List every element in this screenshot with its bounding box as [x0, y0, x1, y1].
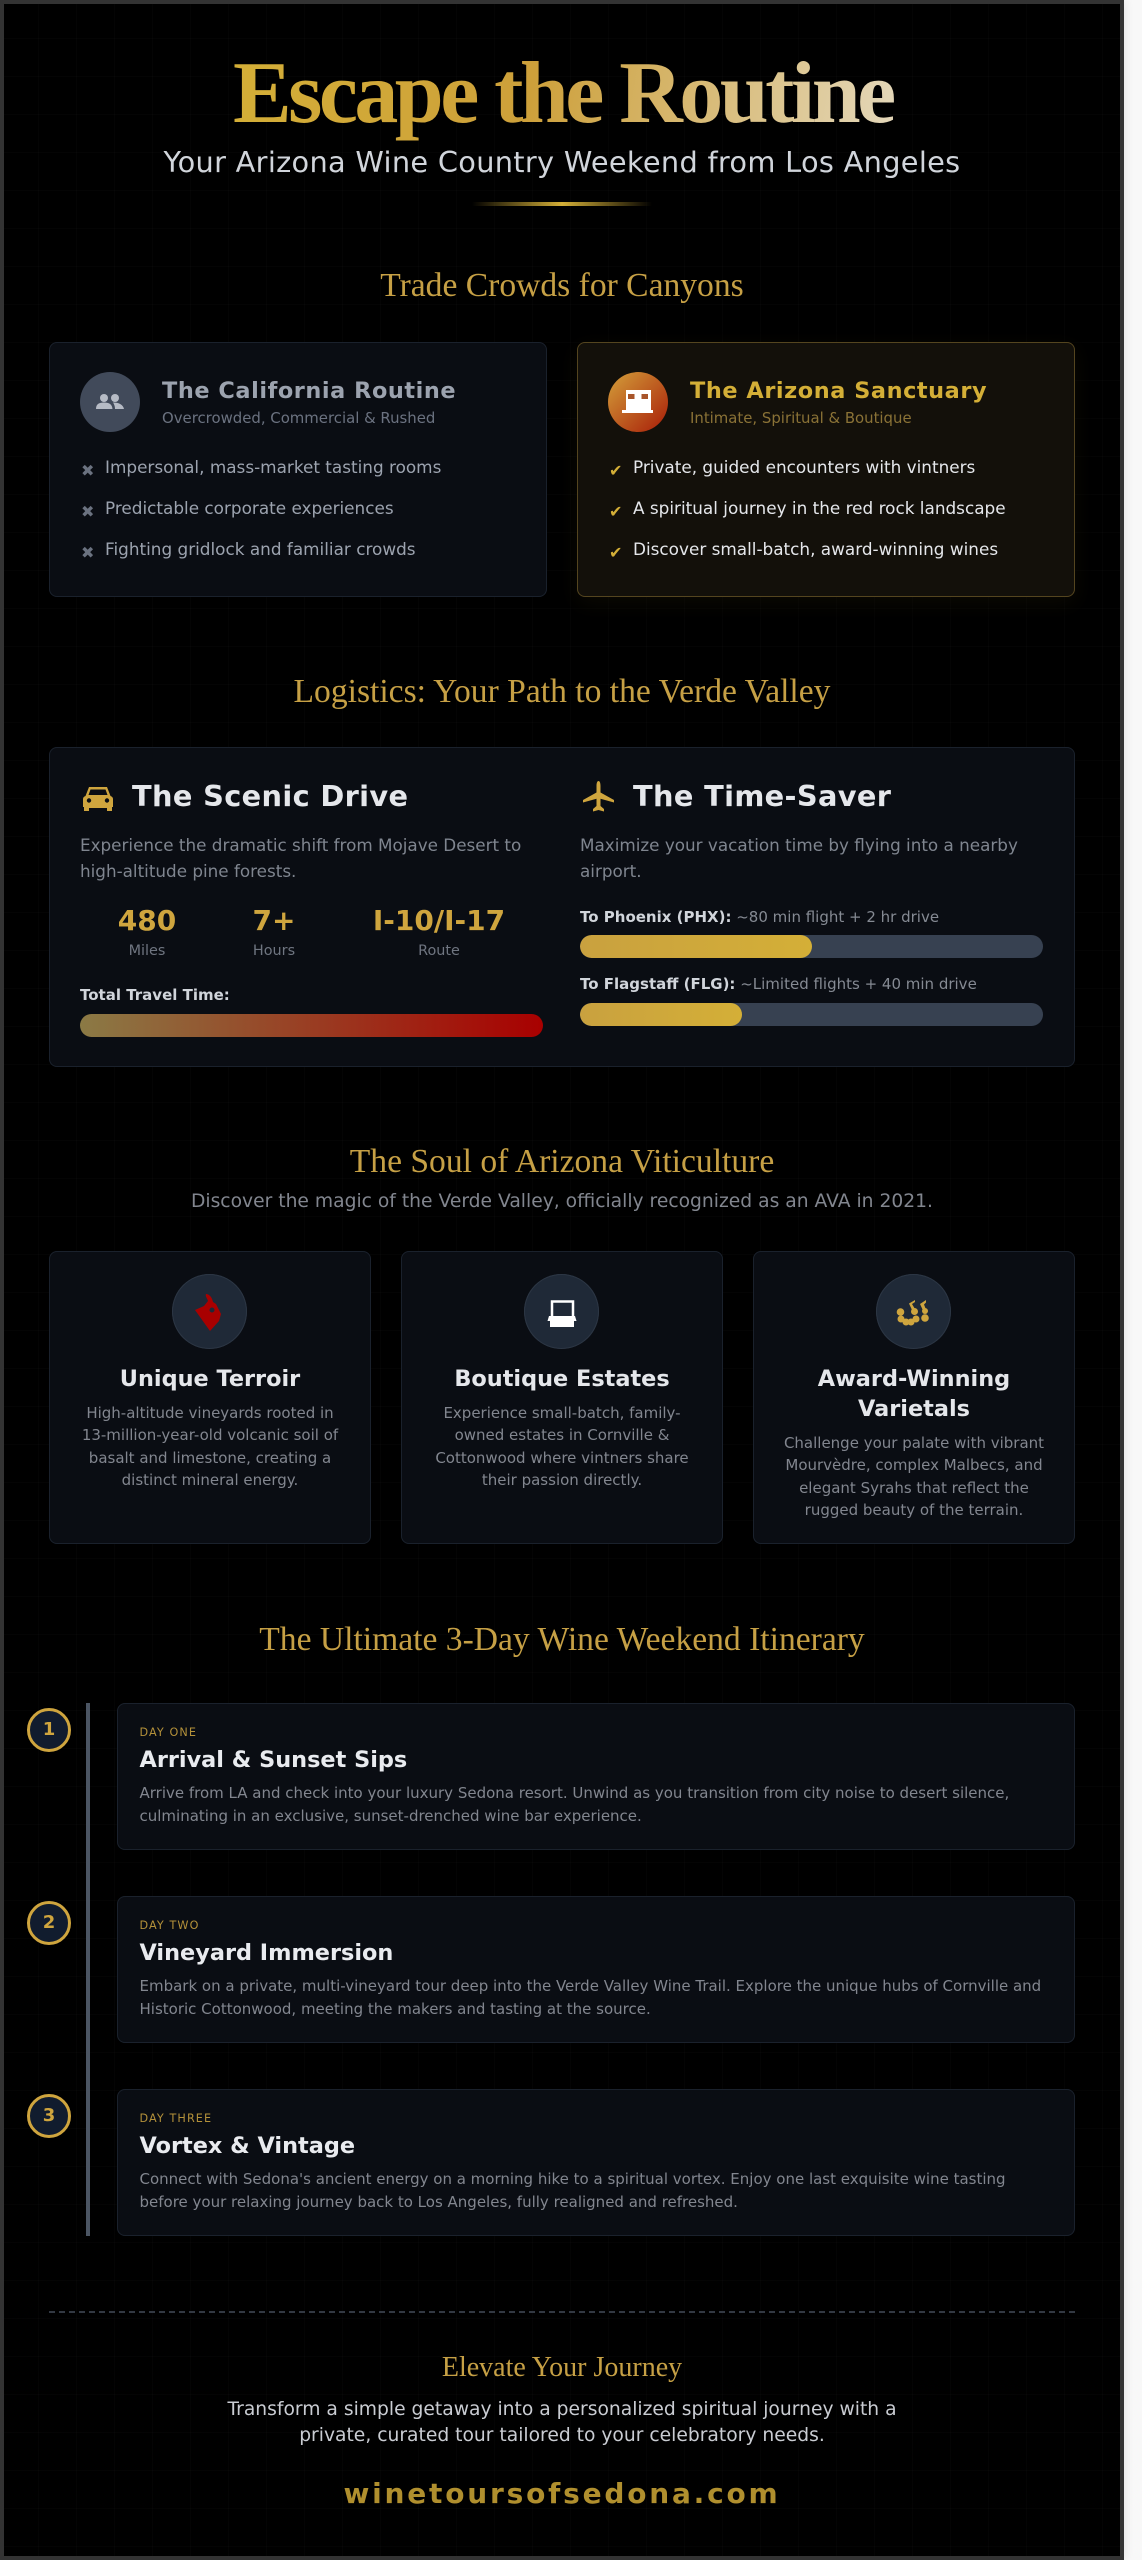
card subtitle: Intimate, Spiritual & Boutique: [690, 408, 912, 426]
list item: Predictable corporate experiences: [105, 498, 394, 518]
heading: trade crowds: Trade Crowds for Canyons: [380, 266, 744, 304]
label: total travel time: Total Travel Time:: [80, 986, 230, 1004]
card text: their passion directly.: [482, 1471, 642, 1489]
panel: boutique estates: [401, 1251, 723, 1544]
stat: hours: [253, 904, 295, 959]
drive description: high-altitude pine forests.: [80, 860, 296, 880]
day three: [27, 2089, 1075, 2236]
panel: unique terroir: [49, 1251, 371, 1544]
heading: soul of arizona: The Soul of Arizona Viticulture: [350, 1143, 774, 1180]
day text: before your relaxing journey back to Los Angeles, fully realigned and refreshed.: [140, 2193, 738, 2211]
step marker: [27, 2094, 71, 2138]
timeline line: [86, 1703, 90, 2236]
step marker: [27, 1708, 71, 1752]
card text: Experience small-batch, family-: [443, 1404, 681, 1422]
card text: elegant Syrahs that reflect the: [799, 1478, 1029, 1496]
card text: Mourvèdre, complex Malbecs, and: [785, 1456, 1043, 1474]
label: phoenix: To Phoenix (PHX): ~80 min flight + 2 hr drive: [580, 908, 939, 926]
list item: ✔: [609, 543, 622, 562]
day card: [117, 2089, 1075, 2236]
heading: logistics: Logistics: Your Path to the Verde Valley: [294, 673, 830, 710]
closing text: private, curated tour tailored to your celebratory needs.: [299, 2425, 825, 2446]
drive description: [80, 834, 521, 880]
card text: Challenge your palate with vibrant: [784, 1434, 1044, 1452]
list item: ✖: [81, 461, 94, 480]
panel: california routine: [49, 342, 547, 597]
card text: [82, 1404, 338, 1489]
gold divider: [472, 202, 652, 206]
stat: route: I-10/I-17: [373, 904, 505, 937]
day text: [140, 1784, 1009, 1825]
label: flagstaff: To Flagstaff (FLG): ~Limited flights + 40 min drive: [580, 975, 977, 993]
stat: miles: 480: [118, 904, 176, 937]
stat: miles: Miles: [129, 943, 165, 959]
list item: ✔: [609, 502, 622, 521]
list item: Discover small-batch, award-winning wines: [633, 539, 998, 559]
website link: winetoursofsedona.com: [343, 2477, 781, 2510]
stat: miles: [118, 904, 176, 959]
card title: The California Routine: [162, 378, 456, 404]
day text: [140, 2170, 1006, 2211]
day text: Arrive from LA and check into your luxury Sedona resort. Unwind as you transition from city noise to desert silence,: [140, 1784, 1009, 1802]
flight description: [580, 834, 1018, 880]
card text: basalt and limestone, creating a: [89, 1448, 331, 1466]
icon: people: [80, 372, 140, 432]
stat: route: [373, 904, 505, 959]
day two: [27, 1896, 1075, 2043]
day label: DAY TWO: [140, 1919, 200, 1932]
day label: DAY ONE: [140, 1726, 197, 1739]
card title: [818, 1366, 1010, 1422]
panel: arizona sanctuary: [577, 342, 1075, 597]
panel: logistics: [49, 747, 1075, 1067]
card text: Cottonwood where vintners share: [435, 1448, 689, 1466]
day label: DAY THREE: [140, 2112, 212, 2125]
step marker: 2: [43, 1912, 55, 1933]
bar: phoenix: [580, 935, 1043, 958]
day text: culminating in an exclusive, sunset-drenched wine bar experience.: [140, 1807, 642, 1825]
card text: [784, 1434, 1044, 1519]
title: Escape the Routine: [233, 45, 893, 142]
bar: flagstaff: [580, 1003, 1043, 1026]
day text: Connect with Sedona's ancient energy on a morning hike to a spiritual vortex. Enjoy one last exquisite wine tasting: [140, 2170, 1006, 2188]
card text: owned estates in Cornville &: [455, 1426, 669, 1444]
drive description: Experience the dramatic shift from Mojave Desert to: [80, 834, 521, 854]
icon: grapes: [876, 1274, 951, 1349]
day card: [117, 1896, 1075, 2043]
drive title: The Scenic Drive: [132, 779, 408, 813]
closing text: Transform a simple getaway into a personalized spiritual journey with a: [227, 2399, 897, 2420]
step marker: 3: [43, 2105, 55, 2126]
card title: Award-Winning: [818, 1366, 1010, 1392]
list item: Impersonal, mass-market tasting rooms: [105, 457, 441, 477]
heading: elevate: Elevate Your Journey: [442, 2352, 682, 2383]
day title: Vortex & Vintage: [140, 2132, 355, 2158]
flight title: The Time-Saver: [633, 779, 891, 813]
step marker: 1: [43, 1719, 55, 1740]
day text: [140, 1977, 1041, 2018]
icon: terroir: [172, 1274, 247, 1349]
list item: ✖: [81, 543, 94, 562]
icon: plane: [583, 781, 614, 812]
list item: ✖: [81, 502, 94, 521]
bar: total travel time: [80, 1014, 543, 1037]
stat: route: Route: [418, 943, 460, 959]
icon: car: [83, 787, 113, 811]
day one: [27, 1703, 1075, 1850]
card title: Unique Terroir: [120, 1366, 300, 1392]
card subtitle: Overcrowded, Commercial & Rushed: [162, 408, 435, 426]
flight description: Maximize your vacation time by flying into a nearby: [580, 834, 1018, 854]
card text: 13-million-year-old volcanic soil of: [82, 1426, 338, 1444]
subtitle: Your Arizona Wine Country Weekend from Los Angeles: [164, 145, 960, 179]
day title: Vineyard Immersion: [140, 1940, 393, 1966]
list item: Fighting gridlock and familiar crowds: [105, 539, 416, 559]
day text: Embark on a private, multi-vineyard tour deep into the Verde Valley Wine Trail. Explore the unique hubs of Cornville and: [140, 1977, 1041, 1995]
stat: hours: 7+: [253, 904, 295, 937]
icon: hotel: [608, 372, 668, 432]
card text: High-altitude vineyards rooted in: [86, 1404, 334, 1422]
section intro: Discover the magic of the Verde Valley, officially recognized as an AVA in 2021.: [191, 1190, 933, 1212]
stat: hours: Hours: [253, 943, 295, 959]
card text: rugged beauty of the terrain.: [805, 1501, 1023, 1519]
closing text: [227, 2399, 897, 2446]
day text: Historic Cottonwood, meeting the makers and tasting at the source.: [140, 2000, 651, 2018]
list item: A spiritual journey in the red rock landscape: [633, 498, 1006, 518]
step marker: [27, 1901, 71, 1945]
heading: itinerary: The Ultimate 3-Day Wine Weekend Itinerary: [259, 1621, 865, 1658]
card title: The Arizona Sanctuary: [690, 378, 987, 404]
list item: Private, guided encounters with vintners: [633, 457, 975, 477]
flight description: airport.: [580, 860, 642, 880]
card title: Varietals: [858, 1396, 970, 1422]
icon: estate: [524, 1274, 599, 1349]
day card: [117, 1703, 1075, 1850]
panel: award-winning varietals: [753, 1251, 1075, 1544]
card text: [435, 1404, 689, 1489]
day title: Arrival & Sunset Sips: [140, 1746, 407, 1772]
card title: Boutique Estates: [454, 1366, 670, 1392]
card text: distinct mineral energy.: [122, 1471, 298, 1489]
list item: ✔: [609, 461, 622, 480]
